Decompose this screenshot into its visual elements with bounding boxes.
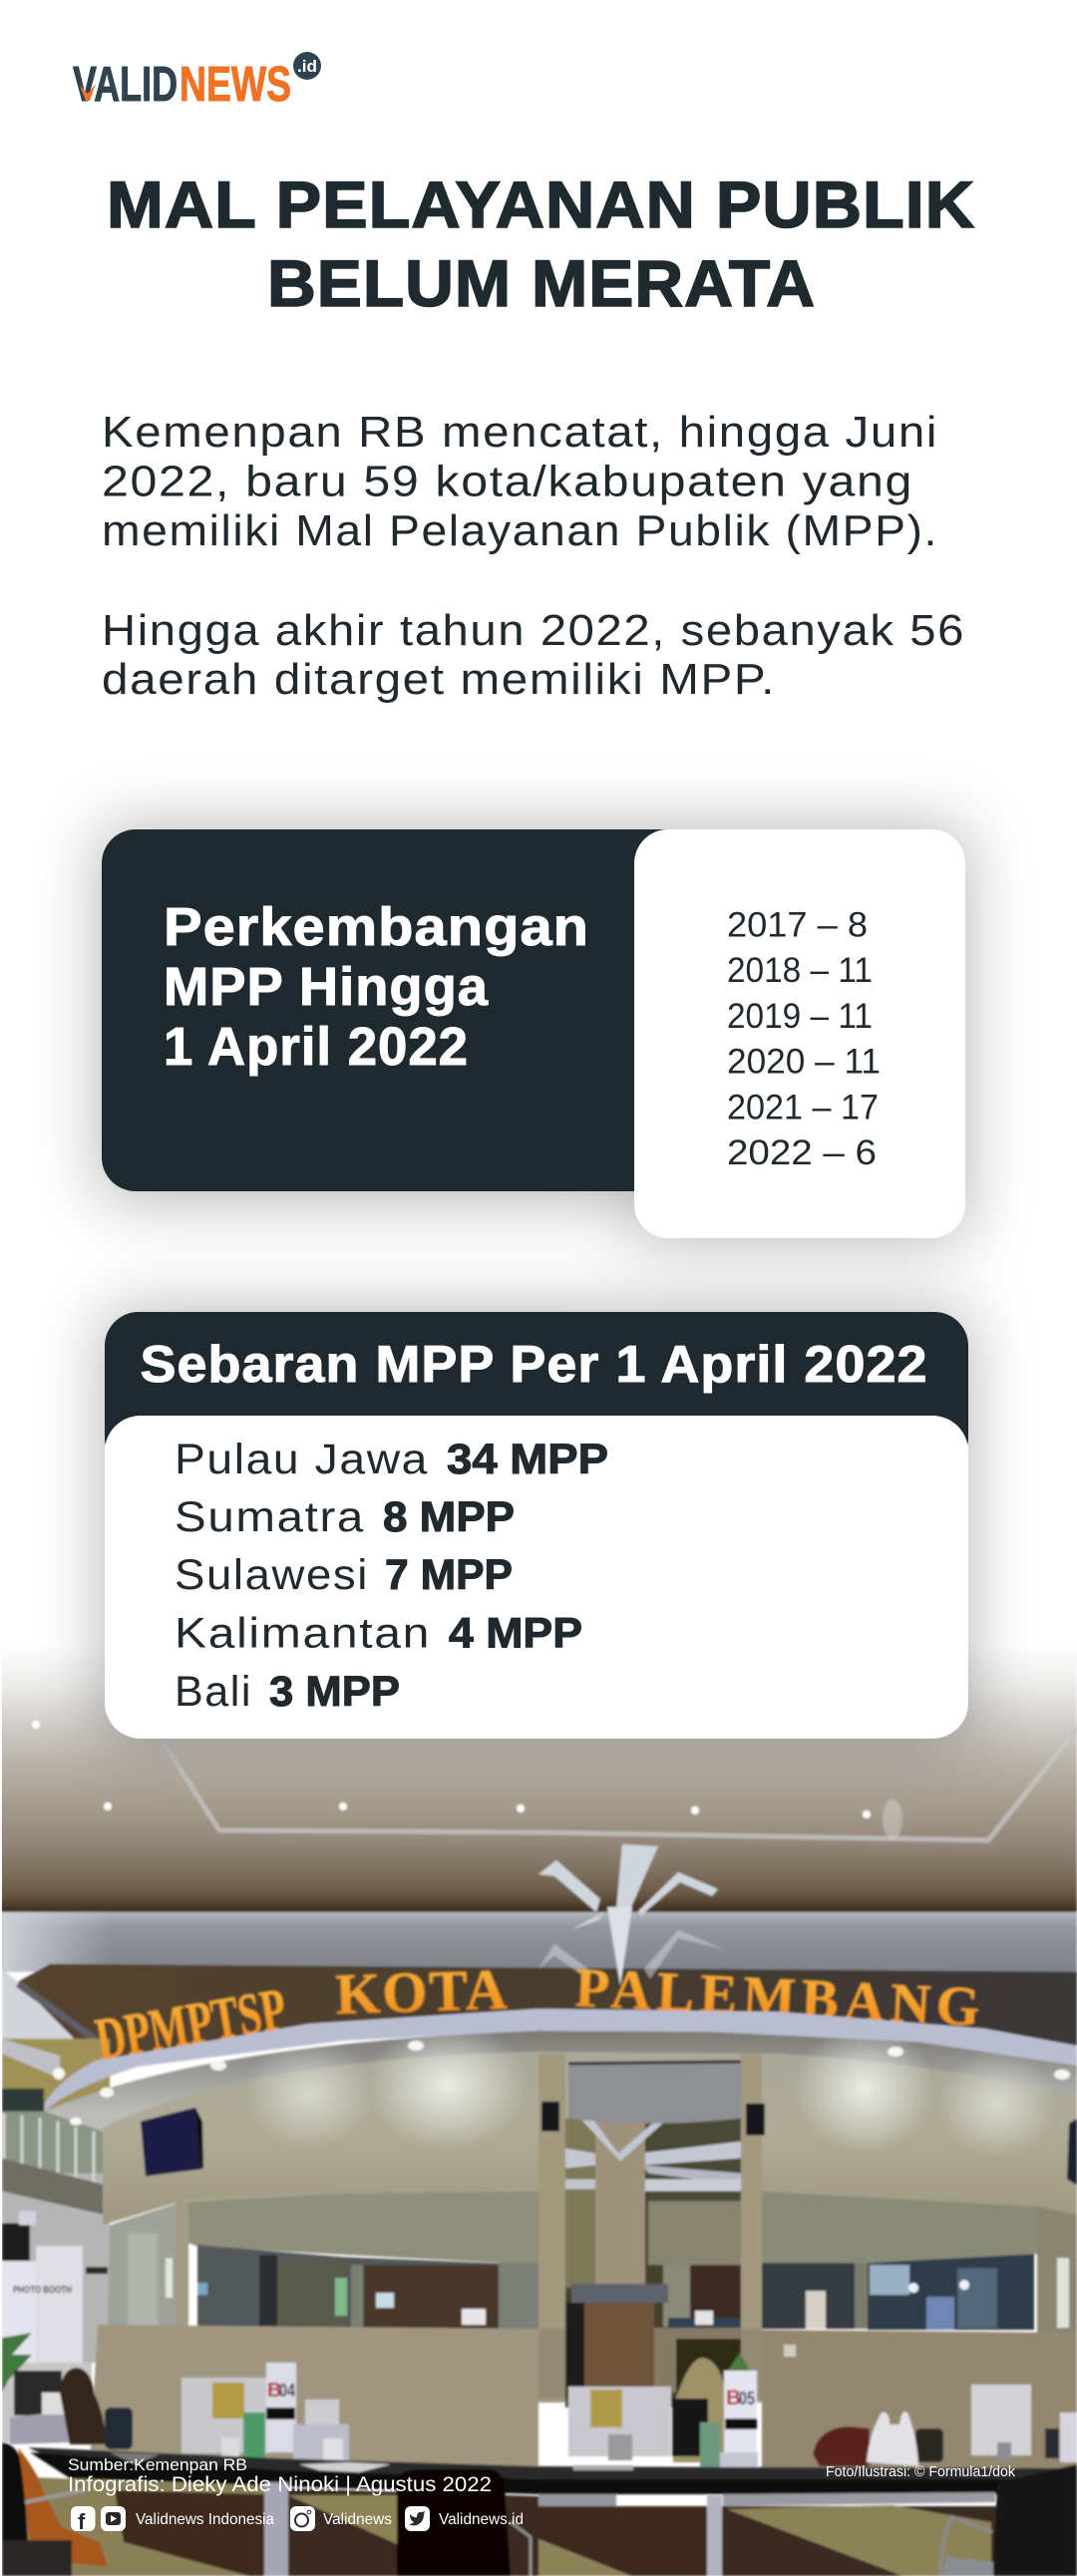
- dark panel with heading: [102, 829, 700, 1191]
- intro text: memiliki Mal Pelayanan Publik (MPP).: [102, 506, 938, 555]
- left glass panes: [108, 2203, 178, 2328]
- list of regions: Kalimantan: [175, 1609, 431, 1657]
- social media row: Validnews.id: [439, 2511, 524, 2528]
- right column and window: [741, 2054, 762, 2403]
- social media row: Validnews: [323, 2511, 392, 2528]
- intro text: Hingga akhir tahun 2022, sebanyak 56: [102, 606, 965, 655]
- title: [107, 167, 975, 320]
- social media row: [71, 2506, 524, 2534]
- lower wall: [90, 2325, 538, 2472]
- card shadows: [102, 829, 968, 1739]
- icon: twitter: [405, 2506, 430, 2531]
- white panel with yearly counts: 2022 – 6: [727, 1133, 877, 1172]
- left reception: [2, 2363, 92, 2442]
- list of regions: 8 MPP: [383, 1493, 515, 1541]
- intro text: daerah ditarget memiliki MPP.: [102, 655, 776, 704]
- background photo: service hall DPMPTSP Kota Palembang: B: [726, 2387, 741, 2410]
- background photo: service hall DPMPTSP Kota Palembang: [0, 1645, 1077, 2576]
- intro text: [102, 408, 965, 704]
- icon: youtube: [101, 2506, 126, 2531]
- monitor, staff and sign B05: [568, 2387, 671, 2456]
- source and credit text: [68, 2455, 492, 2496]
- heading bar: Sebaran MPP Per 1 April 2022: [140, 1336, 927, 1394]
- list of regions: Sumatra: [175, 1493, 365, 1541]
- suspended disc: [568, 2062, 741, 2123]
- list of regions: Sulawesi: [175, 1551, 369, 1599]
- chairs: [397, 2469, 511, 2576]
- background photo: service hall DPMPTSP Kota Palembang: 04: [279, 2381, 295, 2401]
- intro text: Kemenpan RB mencatat, hingga Juni: [102, 408, 938, 457]
- white panel with yearly counts: 2021 – 17: [727, 1089, 879, 1127]
- logo: Validnews.id: VALID: [73, 58, 178, 112]
- white panel with yearly counts: 2017 – 8: [727, 905, 868, 945]
- source and credit text: Sumber:Kemenpan RB: [68, 2455, 247, 2474]
- round wall: [103, 2052, 1077, 2225]
- panel: Perkembangan MPP: [102, 829, 965, 1238]
- monitor and sign B04: [181, 2378, 268, 2453]
- background photo: service hall DPMPTSP Kota Palembang: KOTA: [334, 1957, 508, 2027]
- list of regions: 3 MPP: [269, 1668, 400, 1716]
- dark panel with heading: MPP Hingga: [164, 957, 489, 1017]
- speakers: [541, 2101, 559, 2131]
- under desk panels and floor: [2, 2476, 288, 2576]
- panel: Sebaran MPP: [105, 1312, 968, 1739]
- left side balcony and wall: [2, 2113, 110, 2363]
- white panel with yearly counts: 2018 – 11: [727, 951, 873, 990]
- white panel with yearly counts: 2020 – 11: [727, 1043, 881, 1081]
- icon: facebook: f: [78, 2509, 86, 2534]
- intro text: 2022, baru 59 kota/kabupaten yang: [102, 457, 913, 506]
- dark panel with heading: 1 April 2022: [164, 1017, 469, 1077]
- list of regions: Bali: [175, 1668, 252, 1716]
- logo: Validnews.id: [73, 52, 321, 112]
- list of regions: 34 MPP: [447, 1436, 608, 1483]
- list of regions: 4 MPP: [449, 1609, 582, 1657]
- desk: [28, 2447, 1077, 2479]
- list of regions: 7 MPP: [385, 1551, 513, 1599]
- background photo: service hall DPMPTSP Kota Palembang: PALEMBANG: [573, 1957, 981, 2039]
- underside of ledge: [45, 2031, 1077, 2131]
- bags and right monitor: [813, 2426, 870, 2466]
- white panel with yearly counts: 2019 – 11: [727, 997, 873, 1036]
- logo: Validnews.id: .id: [297, 57, 317, 76]
- dark panel with heading: Perkembangan: [164, 897, 589, 957]
- background photo: service hall DPMPTSP Kota Palembang: PHOTO BOOTH: [13, 2285, 72, 2296]
- background photo: service hall DPMPTSP Kota Palembang: B: [267, 2380, 281, 2402]
- title: BELUM MERATA: [267, 246, 816, 320]
- list of regions: [105, 1416, 968, 1739]
- ledge fascia: [45, 2009, 1077, 2111]
- list of regions: Pulau Jawa: [175, 1436, 429, 1483]
- icon: facebook: [71, 2506, 96, 2534]
- central gap: [538, 2054, 565, 2403]
- sign letters: DPMPTSP: [91, 1976, 290, 2073]
- sculpture: [538, 1844, 723, 1986]
- social media row: Validnews Indonesia: [136, 2511, 274, 2528]
- seated person lower-left: [2, 2442, 28, 2542]
- source and credit text: Infografis: Dieky Ade Ninoki | Agustus 2022: [68, 2473, 492, 2496]
- title: MAL PELAYANAN PUBLIK: [107, 167, 975, 241]
- TV: [141, 2107, 200, 2176]
- photo credit: Foto/Ilustrasi: © Formula1/dok: [826, 2463, 1015, 2480]
- icon: instagram: [290, 2506, 315, 2531]
- logo: Validnews.id: NEWS: [180, 58, 291, 112]
- white panel with yearly counts: [634, 829, 965, 1238]
- background photo: service hall DPMPTSP Kota Palembang: 05: [739, 2389, 755, 2409]
- heading bar: [105, 1312, 968, 1471]
